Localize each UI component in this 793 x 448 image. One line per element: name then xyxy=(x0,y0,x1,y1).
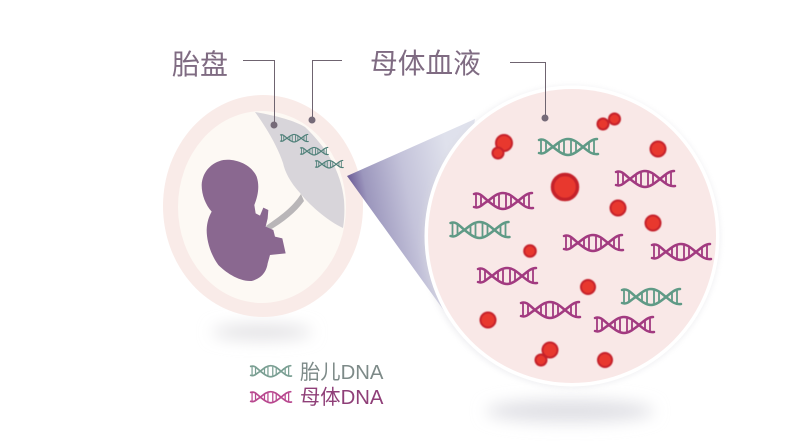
legend icon: maternal DNA xyxy=(251,392,291,403)
fetus xyxy=(202,160,286,281)
legend text: maternal DNA: 母体DNA xyxy=(300,386,384,409)
placenta DNA xyxy=(280,134,343,168)
legend icon: fetal DNA xyxy=(251,366,291,377)
leader line: blood circle xyxy=(510,62,548,122)
shadow: right circle xyxy=(486,400,654,422)
leader line: placenta xyxy=(243,60,278,128)
label: maternal blood: 母体血液 xyxy=(370,48,481,79)
red blood cells xyxy=(480,114,666,367)
legend xyxy=(251,361,384,409)
umbilical cord xyxy=(266,194,304,231)
fetal DNA strands xyxy=(450,139,681,305)
placenta region xyxy=(255,112,344,228)
magnification cone xyxy=(347,119,475,312)
label: placenta: 胎盘 xyxy=(172,49,228,80)
maternal DNA strands xyxy=(474,171,711,333)
panel: magnified blood xyxy=(422,86,720,388)
shadow: left circle xyxy=(212,325,312,339)
panel: uterus xyxy=(163,95,363,317)
leader line: maternal blood in uterus xyxy=(308,60,342,124)
legend text: fetal DNA: 胎儿DNA xyxy=(300,361,384,384)
